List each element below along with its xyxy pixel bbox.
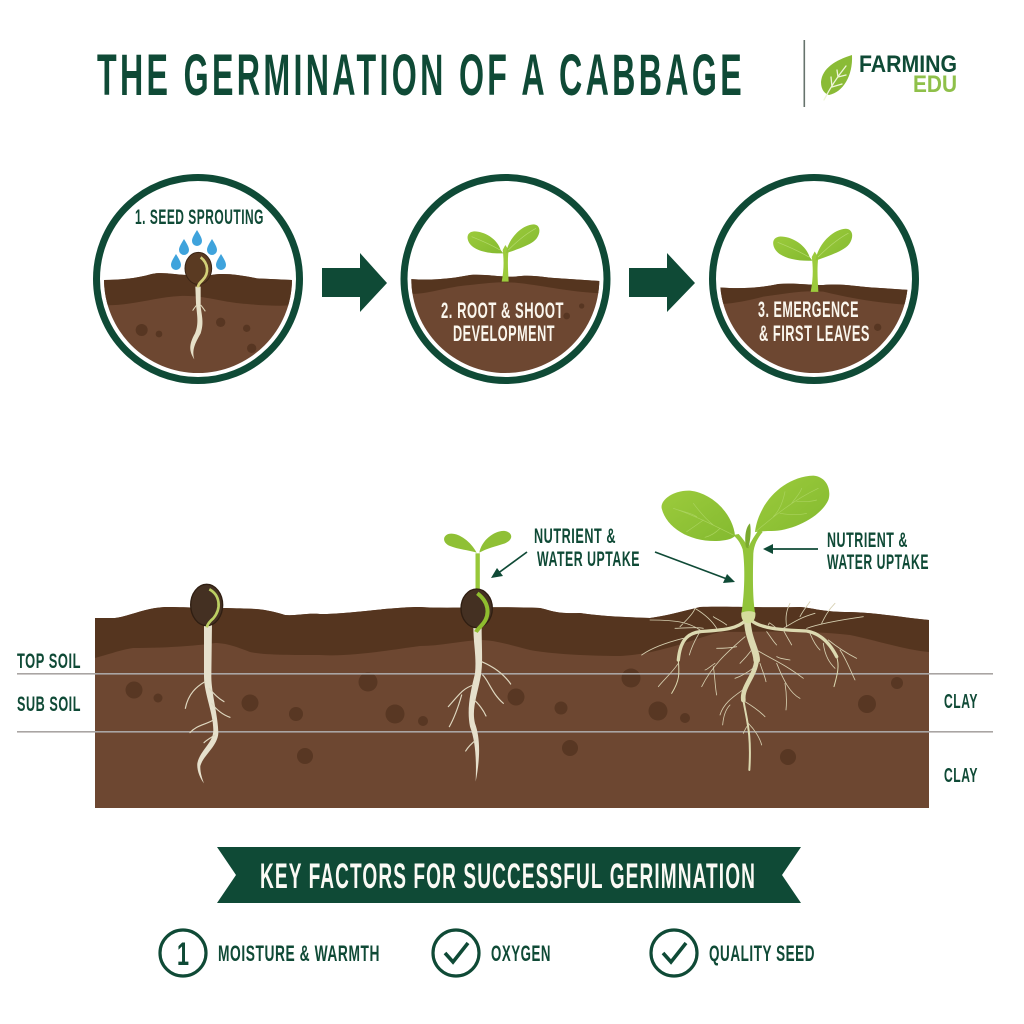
stage 3 label: 3. EMERGENCE [758,297,859,322]
factor: moisture and warmth: MOISTURE & WARMTH [218,941,380,966]
factor: oxygen [433,930,551,976]
root system [642,602,863,770]
logo wordmark [859,51,957,98]
soil layer labels: SUB SOIL [17,693,81,716]
dark top soil band [95,607,929,658]
soil spots [126,668,903,765]
seed 1 with root [185,584,230,783]
arrow: to large seedling shoot [763,544,818,554]
stage 1 label: 1. SEED SPROUTING [135,206,264,229]
stage 2 label [441,298,564,346]
logo wordmark: FARMING [859,51,957,78]
arrow: to seedling 2 [491,552,527,578]
stage 3 label [758,297,870,346]
logo wordmark: EDU [913,71,957,98]
large seedling with roots [642,476,863,770]
soil and seedling 3 [718,229,910,377]
stem and leaves [662,476,829,623]
factor: moisture and warmth: 1 [177,936,189,972]
factor: quality seed [651,930,815,976]
soil layer labels: TOP SOIL [17,650,81,673]
seedling [773,229,852,292]
panel: soil cross-section [95,607,929,808]
factor: oxygen: OXYGEN [491,941,551,966]
icon: leaf [821,55,852,100]
seed and root [185,252,212,359]
banner: key factors [217,847,801,903]
callout: nutrient and water uptake left: WATER UPTAKE [537,548,640,571]
stage 2 label: DEVELOPMENT [453,321,555,346]
callout: nutrient and water uptake right: NUTRIENT & [827,529,908,552]
stage 3 label: & FIRST LEAVES [759,321,870,346]
seed 2 with sprout and root [444,531,511,782]
panel: stage 3 emergence [712,178,916,380]
soil cross-section 1 [100,252,293,377]
callout: nutrient and water uptake left [534,525,640,571]
arrow: to large seedling stem [655,552,735,583]
factor: moisture and warmth [160,930,380,976]
panel: stage 2 root and shoot [404,178,607,380]
callout: nutrient and water uptake right [827,529,929,574]
callout: nutrient and water uptake left: NUTRIENT & [534,525,616,548]
arrow 1 [322,253,387,312]
factor: quality seed: QUALITY SEED [709,941,815,966]
arrow 2 [629,253,695,312]
panel: stage 1 seed sprouting [96,178,300,380]
stage 2 label: 2. ROOT & SHOOT [441,298,564,323]
soil layer labels: CLAY [944,691,978,713]
callout: nutrient and water uptake right: WATER UPTAKE [827,551,929,574]
soil layer labels [17,650,978,787]
water drops [171,230,226,270]
soil layer lines [17,673,993,733]
seedling [468,224,539,282]
logo: Farming EDU [804,40,957,107]
soil and seedling 2 [410,224,600,377]
soil layer labels: CLAY [944,765,978,787]
